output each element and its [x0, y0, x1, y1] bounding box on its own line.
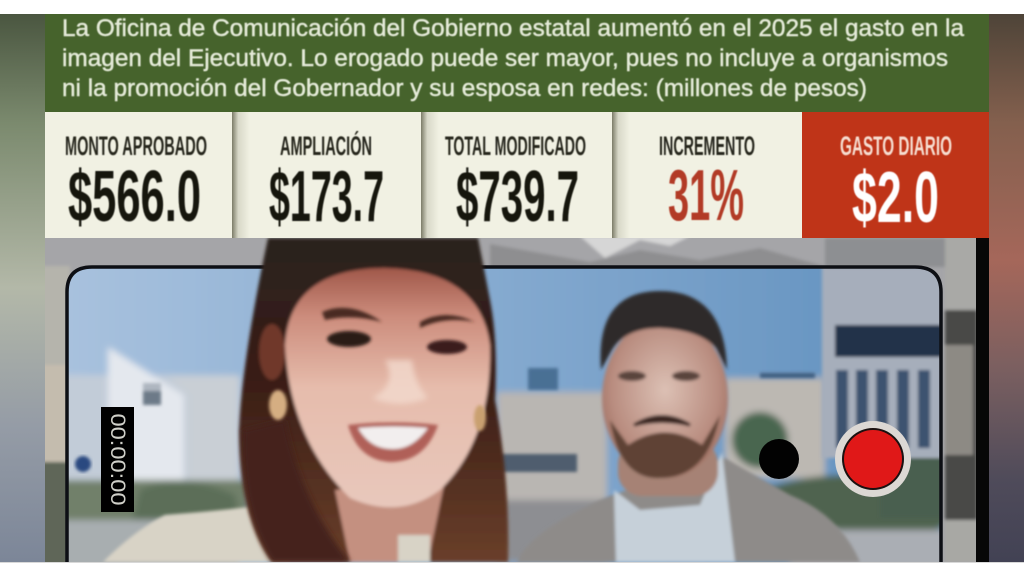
stat card: total modificado: $739.7: [456, 157, 579, 237]
tree: [732, 412, 788, 468]
eyes: [327, 331, 371, 347]
left side blurred band: [0, 14, 45, 562]
stat card: total modificado: [421, 112, 612, 238]
hair: [600, 291, 727, 370]
stat card: monto aprobado: $566.0: [68, 157, 201, 237]
timer label: 00:00:00: [106, 414, 129, 506]
icon: small blue badge: [75, 456, 91, 472]
face features: [322, 308, 475, 462]
stat card: monto aprobado: [45, 112, 232, 238]
right side blurred band: [989, 14, 1024, 562]
stat card: incremento: INCREMENTO: [659, 131, 755, 161]
photo backdrop: [40, 234, 995, 569]
sweater of woman: [103, 505, 290, 562]
stat card: total modificado: TOTAL MODIFICADO: [445, 131, 586, 161]
neck: [616, 448, 720, 496]
face: [285, 268, 490, 507]
shirt: [614, 452, 735, 562]
man: [517, 291, 860, 562]
text: intro paragraph: ni la promoción del Gobernador y su esposa en redes: (millones de pesos): [62, 75, 867, 102]
face: [600, 325, 730, 459]
icon: black dot button: [759, 439, 799, 479]
panel: key figures row: [45, 112, 989, 238]
phone frame outline: [67, 267, 941, 566]
hair strand front: [243, 420, 350, 562]
icon: red record button: [835, 421, 911, 497]
photo: phone recording scene: [40, 234, 995, 575]
eyebrows: [322, 308, 382, 322]
stat card: ampliacion: $173.7: [269, 157, 384, 237]
hair: [239, 238, 508, 562]
bottom edge line: [0, 562, 1024, 563]
beard: [610, 415, 720, 478]
right edge building strip: [824, 238, 976, 522]
stat card: gasto diario: $2.0: [852, 158, 939, 238]
stat card: ampliacion: [232, 112, 421, 238]
city details: [140, 268, 940, 498]
text: intro paragraph: La Oficina de Comunicación del Gobierno estatal aumentó en el 2025 el gasto en la: [62, 15, 965, 42]
smile teeth: [358, 426, 428, 449]
text: intro paragraph: [62, 15, 965, 102]
background buildings behind man: [497, 392, 607, 502]
nose: [372, 360, 428, 404]
earrings: [269, 390, 486, 431]
eyes: [618, 371, 646, 381]
sky and city through phone screen: [68, 268, 940, 562]
lips: [348, 422, 438, 462]
stat card: incremento: 31%: [668, 156, 744, 236]
stat card: ampliacion: AMPLIACIÓN: [280, 130, 372, 161]
timer label: [101, 407, 134, 512]
office tower: [822, 262, 947, 458]
right black band: [976, 238, 989, 562]
text: intro paragraph: imagen del Ejecutivo. Lo erogado puede ser mayor, pues no incluye a organismos: [62, 45, 948, 72]
ear: [259, 324, 285, 380]
stat card: gasto diario: [802, 112, 989, 238]
panel: green header with intro text: [45, 14, 989, 112]
stat card: monto aprobado: MONTO APROBADO: [65, 131, 207, 161]
jacket: [517, 458, 860, 562]
woman: [239, 238, 508, 562]
stat card: incremento: [612, 112, 802, 238]
neck: [335, 480, 445, 562]
